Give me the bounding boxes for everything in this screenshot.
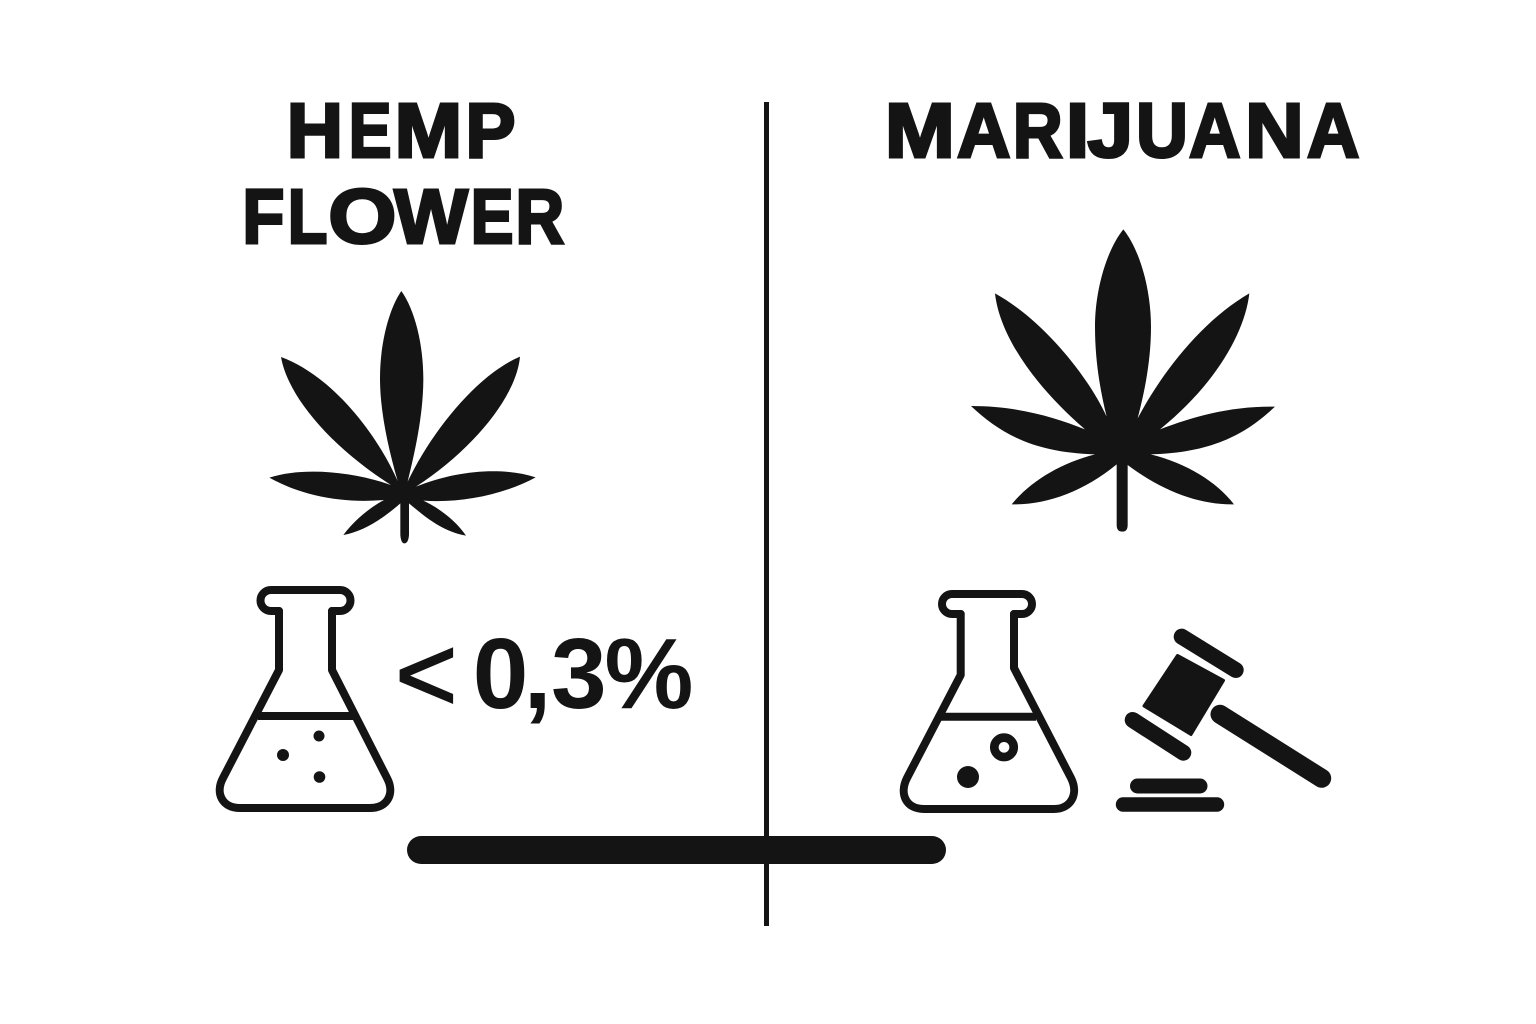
title: marijuana: R	[1013, 88, 1063, 174]
title: hemp flower: M	[395, 88, 462, 174]
title: hemp flower: R	[516, 174, 564, 260]
title: marijuana: A	[957, 88, 1010, 174]
title: hemp flower: O	[328, 174, 396, 260]
title: marijuana: M	[885, 88, 955, 174]
title: hemp flower: H	[287, 88, 343, 174]
horizontal bar	[407, 836, 946, 864]
icon: hemp flask	[220, 590, 390, 808]
icon: marijuana flask	[904, 594, 1074, 809]
title: hemp flower: E	[349, 88, 391, 174]
center divider line	[764, 102, 769, 926]
title: marijuana: A	[1307, 88, 1359, 174]
icon: gavel	[1123, 637, 1322, 804]
title: hemp flower: P	[466, 88, 516, 174]
title: marijuana: J	[1088, 88, 1133, 174]
label: thc percentage: <	[395, 616, 457, 734]
title: hemp flower: F	[242, 174, 284, 260]
title: marijuana: I	[1066, 88, 1089, 174]
title: hemp flower: L	[288, 174, 327, 260]
title: marijuana: A	[1189, 88, 1240, 174]
title: marijuana: N	[1245, 88, 1304, 174]
icon: hemp leaf	[269, 291, 536, 543]
label: thc percentage: 0,3%	[473, 618, 693, 730]
icon: marijuana leaf	[971, 229, 1275, 532]
title: hemp flower: W	[394, 174, 468, 260]
title: hemp flower	[242, 88, 564, 260]
title: hemp flower: E	[471, 174, 513, 260]
title: marijuana: U	[1136, 88, 1188, 174]
